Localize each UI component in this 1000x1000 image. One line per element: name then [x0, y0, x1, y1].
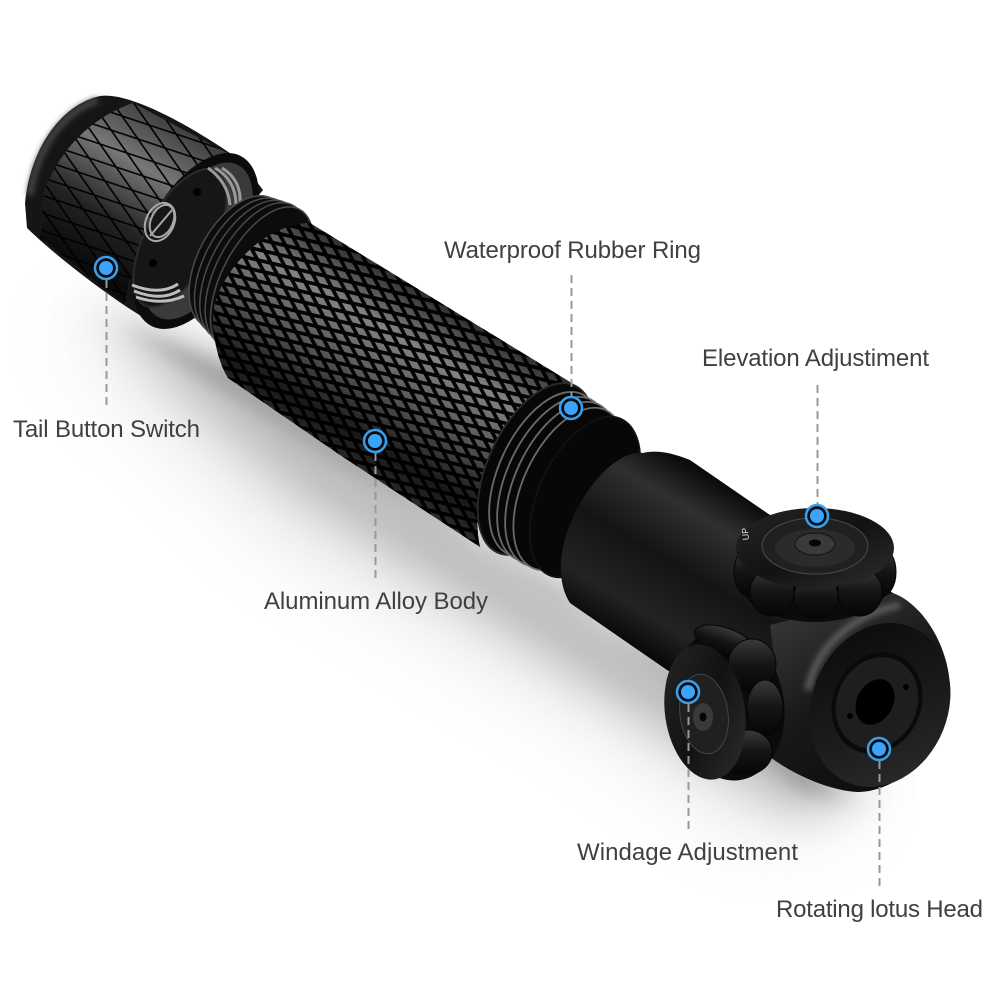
callout: tail button switch [13, 257, 200, 443]
soft floor shadow [60, 300, 880, 830]
callout: tail button switch: Tail Button Switch [13, 416, 200, 443]
knurled body [213, 223, 575, 547]
head tube [561, 452, 893, 740]
callout: aluminum alloy body: Aluminum Alloy Body [264, 588, 488, 615]
threaded neck left [169, 180, 335, 369]
tail cap [23, 94, 263, 329]
elevation knob: UP [740, 527, 751, 541]
callout: elevation adjustment [702, 345, 929, 527]
callout: waterproof rubber ring: Waterproof Rubber Ring [444, 237, 701, 264]
threaded neck right [454, 365, 663, 594]
flashlight product [20, 90, 975, 808]
callout: rotating lotus head: Rotating lotus Head [776, 896, 983, 923]
callout: waterproof rubber ring [444, 237, 701, 419]
spring [139, 198, 181, 246]
callout: aluminum alloy body [264, 430, 488, 615]
callout: rotating lotus head [776, 738, 983, 923]
windage knob [656, 618, 796, 790]
callout: windage adjustment [577, 681, 798, 866]
callout: windage adjustment: Windage Adjustment [577, 839, 798, 866]
elevation knob [734, 508, 896, 622]
callout: elevation adjustment: Elevation Adjustiment [702, 345, 929, 372]
rotating head block [750, 593, 975, 808]
